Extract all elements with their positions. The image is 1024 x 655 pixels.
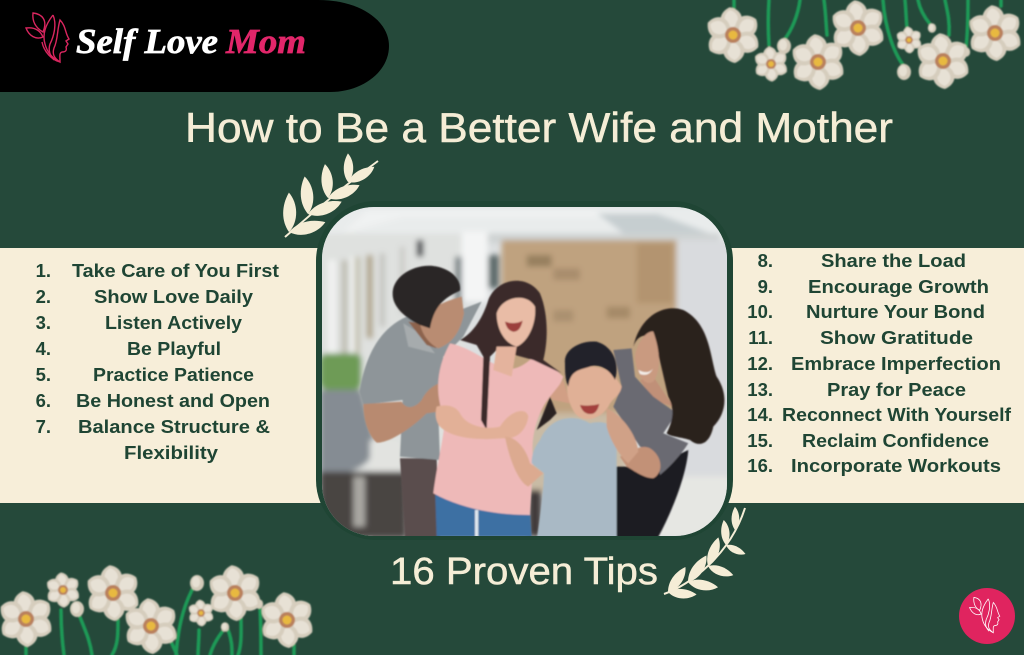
right tips list: 12. <box>747 353 773 374</box>
left tips list: 5. <box>36 364 51 385</box>
title: How to Be a Better Wife and Mother <box>185 104 893 151</box>
left list panel <box>0 248 330 503</box>
stems <box>734 0 1001 66</box>
right tips list: Reconnect With Yourself <box>782 404 1012 425</box>
right tips list: Embrace Imperfection <box>791 353 1001 374</box>
right tips list: 8. <box>758 250 773 271</box>
left tips list: Take Care of You First <box>72 260 279 281</box>
right tips list: Incorporate Workouts <box>791 455 1001 476</box>
logo banner <box>0 0 389 92</box>
girl <box>433 281 570 537</box>
leaf sprig top <box>272 153 378 241</box>
right tips list: Pray for Peace <box>827 379 966 400</box>
pink logo badge <box>959 588 1015 644</box>
right tips list: 11. <box>748 327 773 348</box>
left tips list: Listen Actively <box>105 312 243 333</box>
right tips list: Encourage Growth <box>808 276 989 297</box>
left tips list: 4. <box>36 338 51 359</box>
left tips list: 2. <box>36 286 51 307</box>
logo icon: butterfly face <box>26 13 69 62</box>
boy <box>532 341 638 540</box>
house background <box>320 207 742 538</box>
leaf sprig bottom <box>662 507 746 607</box>
right tips list <box>747 250 1012 476</box>
right tips list: Show Gratitude <box>820 327 973 348</box>
left tips list: Show Love Daily <box>94 286 254 307</box>
right tips list: 16. <box>747 455 773 476</box>
left tips list <box>36 260 279 463</box>
right tips list: 13. <box>747 379 773 400</box>
flowers bottom left <box>0 564 317 655</box>
left tips list: 7. <box>36 416 51 437</box>
right tips list: 15. <box>747 430 773 451</box>
logo wordmark: Self Love <box>76 22 218 61</box>
right tips list: 14. <box>747 404 773 425</box>
photo frame <box>316 201 733 540</box>
right tips list: 10. <box>747 301 773 322</box>
left tips list: Practice Patience <box>93 364 254 385</box>
right list panel <box>720 248 1024 503</box>
right tips list: Nurture Your Bond <box>806 301 985 322</box>
stems <box>26 590 294 655</box>
man <box>359 266 482 540</box>
left tips list: 6. <box>36 390 51 411</box>
left tips list: Be Honest and Open <box>76 390 270 411</box>
subtitle: 16 Proven Tips <box>390 551 658 593</box>
family photo <box>320 205 742 540</box>
left tips list: Be Playful <box>127 338 221 359</box>
right tips list: Share the Load <box>821 250 966 271</box>
left tips list: 3. <box>36 312 51 333</box>
left tips list: Balance Structure & <box>78 416 270 437</box>
flowers top right <box>703 0 1024 90</box>
badge icon <box>970 597 1000 633</box>
logo wordmark: Mom <box>225 22 306 61</box>
left tips list: Flexibility <box>124 442 219 463</box>
logo wordmark <box>76 22 306 61</box>
woman <box>613 308 724 540</box>
left tips list: 1. <box>36 260 51 281</box>
right tips list: 9. <box>758 276 773 297</box>
right tips list: Reclaim Confidence <box>802 430 989 451</box>
